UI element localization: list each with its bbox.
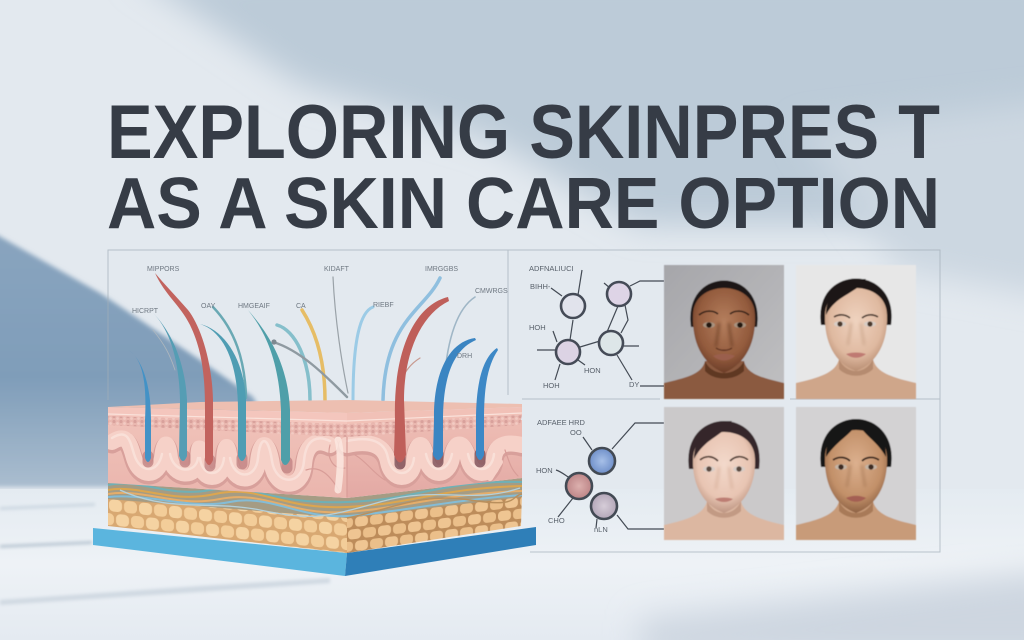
title xyxy=(107,90,940,244)
base plate xyxy=(93,527,536,576)
molecule node xyxy=(599,331,623,355)
skin cross-section diagram xyxy=(93,266,536,576)
molecule labels xyxy=(536,418,608,534)
molecule labels: HON xyxy=(536,466,553,475)
hair labels: CMWRGS xyxy=(475,288,508,295)
molecule labels: HON xyxy=(584,366,601,375)
hair labels: IMRGGBS xyxy=(425,266,458,273)
hair labels: DRH xyxy=(457,353,472,360)
molecule node xyxy=(589,448,615,474)
hair labels: OAY xyxy=(201,303,216,310)
hair labels: RIEBF xyxy=(373,302,394,309)
dermis with papillae xyxy=(108,420,522,498)
hair labels: CA xyxy=(296,303,306,310)
hair labels: HMGEAIF xyxy=(238,303,270,310)
hair labels: KIDAFT xyxy=(324,266,350,273)
epidermis top slab xyxy=(108,400,522,424)
hair labels: MIPPORS xyxy=(147,266,180,273)
molecule diagram: upper xyxy=(529,264,664,390)
molecule node xyxy=(566,473,592,499)
portrait: pale skin, grey background xyxy=(664,407,784,540)
hair labels xyxy=(132,266,508,360)
fold shading xyxy=(112,440,522,486)
needle xyxy=(271,339,347,397)
portrait: tan skin, grey background xyxy=(796,407,916,540)
molecule labels: ADFAEE HRD xyxy=(537,418,586,427)
molecule node xyxy=(561,294,585,318)
title: AS A SKIN CARE OPTION xyxy=(107,164,940,244)
fold highlights xyxy=(112,434,494,480)
molecule labels xyxy=(529,264,639,390)
molecule labels: ADFNALIUCI xyxy=(529,264,574,273)
fat layer xyxy=(108,493,522,553)
molecule labels: HOH xyxy=(543,381,560,390)
fold bodies xyxy=(112,438,522,484)
molecule labels: CHO xyxy=(548,516,565,525)
granular layer xyxy=(108,415,522,437)
molecule node xyxy=(591,493,617,519)
pit shadows around hair roots xyxy=(148,456,287,468)
molecule labels: BIHH- xyxy=(530,282,551,291)
hair labels: HICRPT xyxy=(132,308,159,315)
molecule labels: OO xyxy=(570,428,582,437)
portrait: fair skin, light background xyxy=(796,265,916,399)
molecule labels: nLN xyxy=(594,525,608,534)
molecule node xyxy=(556,340,580,364)
wavy fibre layer xyxy=(108,478,522,518)
callout hairs behind the skin block xyxy=(153,277,475,400)
molecule diagram: lower xyxy=(536,418,664,534)
panel frame lines xyxy=(108,250,940,552)
title: EXPLORING SKINPRES T xyxy=(107,90,940,175)
hair follicles xyxy=(128,273,498,465)
cell divisions xyxy=(306,430,518,497)
molecule node xyxy=(607,282,631,306)
portrait: deep skin tone xyxy=(664,265,784,399)
molecule labels: DY xyxy=(629,380,639,389)
molecule labels: HOH xyxy=(529,323,546,332)
